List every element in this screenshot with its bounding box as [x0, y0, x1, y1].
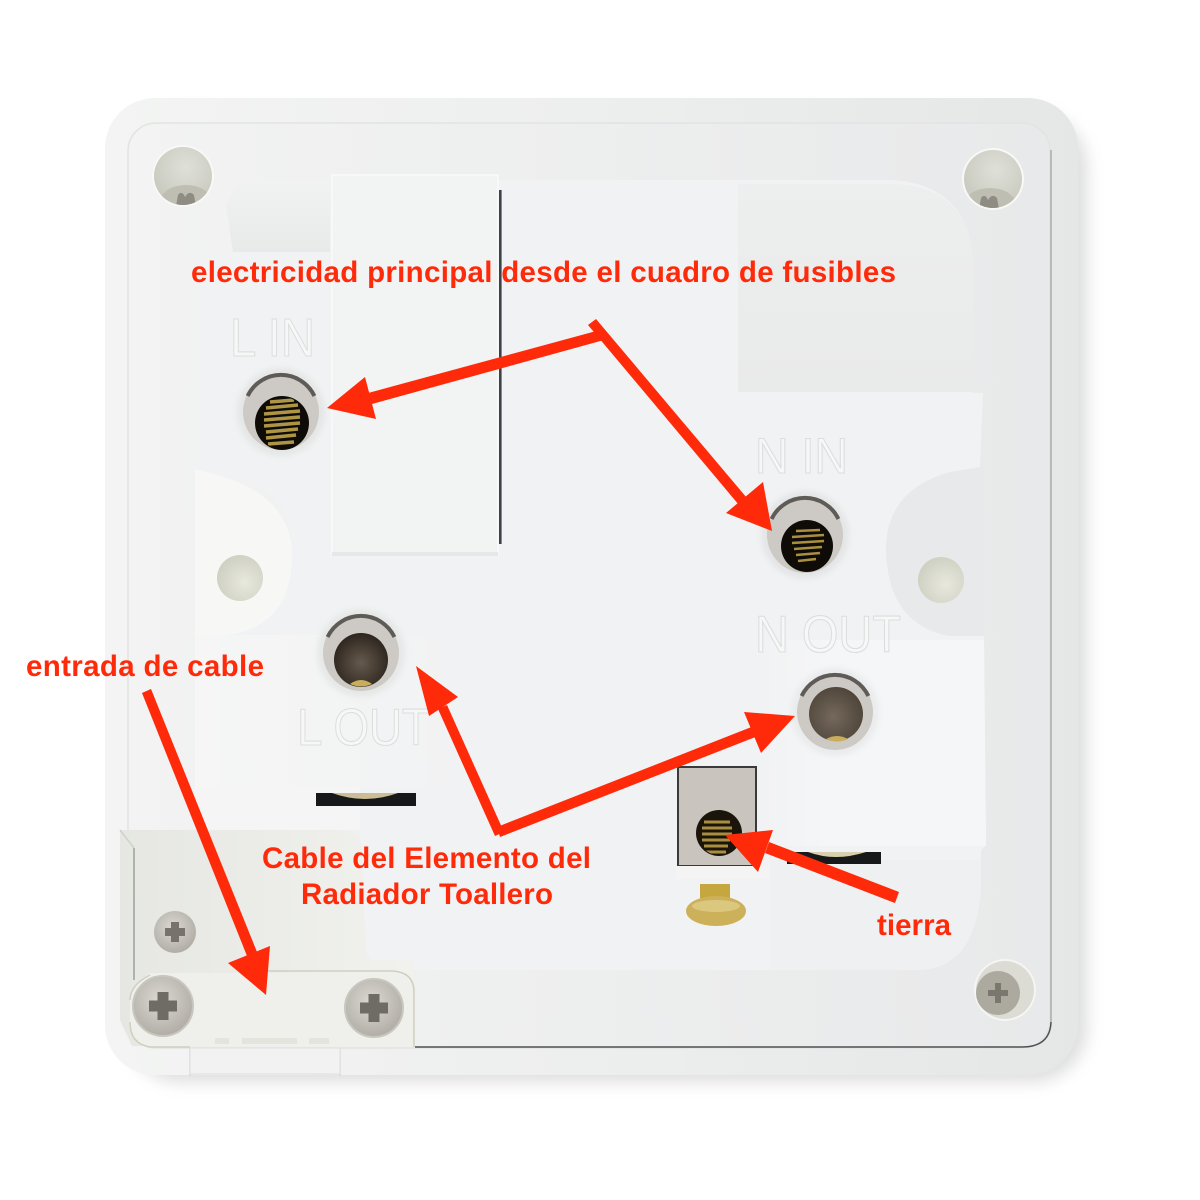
- grey recess top right: [738, 184, 973, 392]
- slot under earth: [787, 852, 881, 864]
- terminal: L OUT: [317, 609, 405, 697]
- label: earth: tierra: [877, 909, 952, 942]
- cable entry compartment: [120, 830, 414, 1047]
- embossed terminal markings: L IN: [230, 308, 315, 368]
- corner screw: bottom right: [974, 959, 1036, 1021]
- arrow: cable entry: [142, 689, 270, 995]
- side mounting hole: right: [918, 557, 964, 603]
- label: towel radiator element cable: Radiador Toallero: [301, 878, 553, 911]
- compartment screw: small: [154, 911, 196, 953]
- central raised switch block: [226, 175, 502, 556]
- raised terminal body: [195, 175, 986, 970]
- embossed terminal markings: [230, 308, 901, 757]
- side mounting hole: left: [217, 555, 263, 601]
- arrow: to earth: [725, 830, 899, 903]
- embossed terminal markings: N OUT: [755, 606, 901, 664]
- lower edge strip: [190, 1048, 340, 1074]
- label: towel radiator element cable: Cable del Elemento del: [262, 842, 591, 875]
- corner screw: top right: [962, 148, 1024, 210]
- compartment screw: left: [133, 976, 193, 1036]
- arrow: to N OUT: [497, 712, 795, 837]
- terminal: L IN: [237, 368, 325, 456]
- label: cable entry: entrada de cable: [26, 650, 264, 683]
- embossed terminal markings: L OUT: [297, 699, 430, 757]
- terminal: N OUT: [791, 668, 879, 756]
- arrow: to L OUT: [416, 666, 504, 836]
- corner screw: top left: [154, 147, 212, 205]
- earth terminal block: [677, 766, 757, 866]
- socket back plate: [105, 98, 1087, 1082]
- label: towel radiator element cable: [262, 842, 591, 911]
- left lobe around mounting hole: [195, 470, 292, 635]
- arrow: to N IN: [588, 319, 772, 531]
- earth brass screw: [686, 884, 746, 926]
- embossed terminal markings: N IN: [755, 428, 848, 484]
- terminal: N IN: [761, 491, 849, 579]
- label: mains electricity: electricidad principal desde el cuadro de fusibles: [191, 256, 896, 289]
- compartment screw: right: [345, 979, 403, 1037]
- arrow: to L IN: [327, 330, 604, 419]
- slot under L OUT: [316, 793, 416, 806]
- right lobe around mounting hole: [886, 467, 984, 636]
